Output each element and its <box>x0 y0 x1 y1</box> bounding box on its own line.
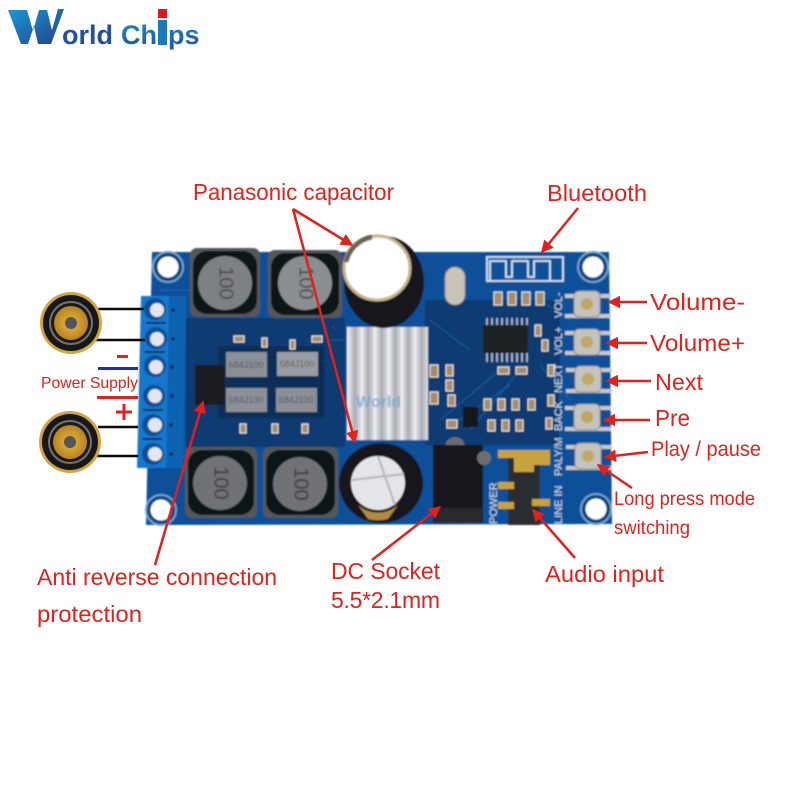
terminal block <box>137 296 186 468</box>
small SMD parts <box>234 292 554 433</box>
logo: World Chips: i <box>158 20 166 50</box>
PCB base <box>146 252 612 525</box>
regulator <box>463 407 478 427</box>
capacitor: bottom <box>339 443 423 523</box>
DC socket <box>433 437 491 523</box>
inductors: 100 <box>215 266 237 300</box>
minus sign <box>117 355 128 358</box>
speaker wires <box>95 309 145 456</box>
controller chip <box>483 318 528 362</box>
audio jack <box>498 450 550 525</box>
grey filter inductors: 684J100 <box>280 359 314 369</box>
label: Anti reverse connection: Anti reverse connection <box>37 564 277 590</box>
label: Bluetooth: Bluetooth <box>547 180 647 206</box>
logo: World Chips: Ch <box>121 20 157 50</box>
heatsink: World <box>356 394 401 411</box>
silkscreen labels <box>488 292 565 524</box>
capacitor: top <box>344 236 424 328</box>
label: Play / pause: Play / pause <box>651 438 761 461</box>
label: Next: Next <box>655 369 704 395</box>
grey filter inductors <box>218 346 324 418</box>
speaker: bottom <box>39 411 101 473</box>
arrow: volume minus <box>609 301 647 303</box>
tact buttons <box>565 291 612 470</box>
silkscreen labels: VOL+ <box>553 327 565 355</box>
circuit board <box>137 236 612 525</box>
plus sign <box>116 404 132 420</box>
bluetooth antenna <box>486 257 563 281</box>
dark shaded area <box>186 300 560 447</box>
logo: World Chips: orld <box>62 20 113 50</box>
arrow: next <box>607 380 651 382</box>
arrow: pre <box>604 419 650 421</box>
silkscreen labels: BACK <box>553 400 565 431</box>
arrow: long press <box>598 465 632 488</box>
heatsink <box>347 327 428 440</box>
arrow: bluetooth <box>542 208 578 252</box>
mounting holes <box>146 252 611 525</box>
silkscreen labels: LINE IN <box>553 485 565 524</box>
grey filter inductors: 684J100 <box>229 395 263 405</box>
label: Long press mode: Long press mode <box>614 489 755 510</box>
traces <box>160 290 570 440</box>
inductors: 100 <box>295 266 317 300</box>
label: Audio input: Audio input <box>545 561 665 587</box>
inductors: 100 <box>210 466 232 500</box>
crystal <box>445 267 465 305</box>
logo: World Chips <box>8 9 200 50</box>
inductors <box>185 248 342 518</box>
power supply polarity marks <box>41 355 138 420</box>
arrow: audio input <box>533 510 575 558</box>
arrow: anti reverse <box>155 402 203 565</box>
arrow: capacitor bottom <box>293 209 355 442</box>
label: Volume minus: Volume- <box>650 289 745 315</box>
silkscreen labels: VOL- <box>553 292 565 318</box>
power supply label: Power Supply <box>41 375 138 392</box>
arrow: DC socket <box>372 507 440 560</box>
silkscreen labels: NEXT <box>553 363 565 393</box>
label: DC Socket: DC Socket <box>331 558 441 584</box>
speaker: top <box>40 292 102 354</box>
label: Panasonic capacitor: Panasonic capacitor <box>193 179 394 205</box>
arrow: capacitor top <box>293 209 352 245</box>
grey filter inductors: 684J100 <box>229 360 263 370</box>
silkscreen labels: PALY/M <box>553 437 565 476</box>
label: socket size: 5.5*2.1mm <box>331 587 440 613</box>
logo: World Chips: ps <box>168 20 200 50</box>
callout arrows <box>155 208 651 565</box>
positive wire <box>97 396 138 399</box>
label: Volume plus: Volume+ <box>650 330 745 356</box>
negative wire <box>98 367 138 370</box>
label: Pre: Pre <box>655 405 690 431</box>
arrow: volume plus <box>607 342 647 344</box>
silkscreen labels: POWER <box>488 482 500 524</box>
inductors: 100 <box>290 467 312 501</box>
label: protection: protection <box>37 601 142 627</box>
arrow: play pause <box>605 452 648 457</box>
protection MOSFET <box>195 365 225 405</box>
grey filter inductors: 684J100 <box>279 395 313 405</box>
label: switching: switching <box>614 518 690 539</box>
